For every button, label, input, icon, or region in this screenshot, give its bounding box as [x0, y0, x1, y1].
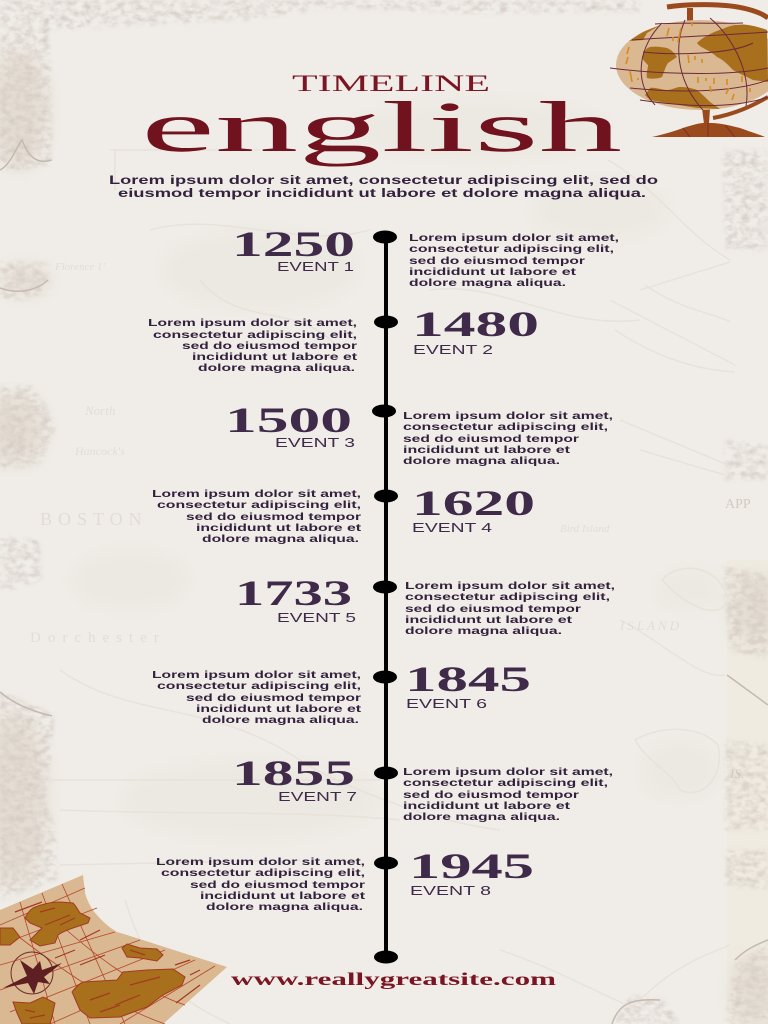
land: left continent	[0, 928, 20, 945]
event 7: dolore magna aliqua.	[403, 811, 560, 823]
event 7: Lorem ipsum dolor sit amet,	[403, 766, 613, 778]
event 1	[232, 224, 619, 289]
event 1: EVENT 1	[277, 259, 354, 274]
event 3: sed do eiusmod tempor	[403, 433, 579, 445]
land: lower continent	[645, 87, 720, 109]
event 4: sed do eiusmod tempor	[186, 511, 361, 523]
event 1: Lorem ipsum dolor sit amet,	[409, 232, 619, 244]
background: antique map: North	[84, 403, 115, 418]
background: antique map: Bird Island	[560, 523, 610, 535]
event 4: dolore magna aliqua.	[202, 533, 359, 545]
land: middle continent	[642, 47, 677, 79]
title: TIMELINE: TIMELINE	[292, 71, 490, 96]
event 3: 1500	[225, 400, 352, 440]
event 8: dolore magna aliqua.	[206, 901, 363, 913]
event 4	[152, 483, 535, 545]
globe stand	[652, 123, 765, 137]
event 8: Lorem ipsum dolor sit amet,	[156, 856, 365, 868]
event 2: sed do eiusmod tempor	[182, 340, 357, 352]
event 1: 1250	[232, 224, 355, 264]
icon: globe	[610, 5, 768, 137]
event 6: sed do eiusmod tempor	[186, 692, 361, 704]
event 2	[148, 304, 539, 374]
title: english: english	[141, 87, 622, 167]
intro text	[109, 173, 658, 200]
event 1: dolore magna aliqua.	[409, 277, 566, 289]
event 7: sed do eiusmod tempor	[403, 789, 579, 801]
event 6: EVENT 6	[406, 696, 487, 711]
background: antique map: Dorchester	[30, 630, 166, 646]
land: small island	[122, 944, 163, 961]
event 7: EVENT 7	[278, 789, 357, 804]
event 2: incididunt ut labore et	[192, 351, 358, 363]
background: antique map: BOSTON	[40, 509, 148, 529]
intro text: Lorem ipsum dolor sit amet, consectetur adipiscing elit, sed do	[109, 173, 658, 187]
event 3: consectetur adipiscing elit,	[403, 421, 608, 433]
background: antique map: ISLAND	[619, 618, 682, 633]
event 5	[235, 573, 615, 637]
event 3	[225, 400, 613, 467]
event 6: incididunt ut labore et	[196, 703, 362, 715]
event 3: EVENT 3	[275, 435, 355, 450]
event 6: 1845	[405, 659, 531, 699]
event 5: consectetur adipiscing elit,	[405, 591, 610, 603]
event 5: Lorem ipsum dolor sit amet,	[405, 580, 615, 592]
event 6	[152, 659, 531, 726]
event 8: sed do eiusmod tempor	[190, 879, 365, 891]
event 5: EVENT 5	[277, 610, 356, 625]
event 4: EVENT 4	[412, 520, 492, 535]
event 5: sed do eiusmod tempor	[405, 603, 581, 615]
event 5: 1733	[235, 573, 352, 613]
event 8: EVENT 8	[410, 883, 491, 898]
land: bottom continent	[13, 997, 55, 1024]
event 8: consectetur adipiscing elit,	[161, 867, 365, 879]
event 2: consectetur adipiscing elit,	[153, 329, 357, 341]
event 2: dolore magna aliqua.	[198, 362, 355, 374]
background: antique map: IS.	[729, 766, 744, 781]
event 6: consectetur adipiscing elit,	[157, 680, 361, 692]
event 5: incididunt ut labore et	[405, 614, 573, 626]
event 2: EVENT 2	[413, 342, 493, 357]
event 6: dolore magna aliqua.	[202, 714, 359, 726]
event 2: Lorem ipsum dolor sit amet,	[148, 317, 357, 329]
event 1: sed do eiusmod tempor	[409, 255, 585, 267]
event 6: Lorem ipsum dolor sit amet,	[152, 669, 361, 681]
land: large continent	[72, 969, 185, 1018]
icon: compass rose	[3, 952, 62, 994]
background: antique map: APP	[725, 497, 751, 512]
icon: treasure map	[0, 875, 227, 1024]
land: upper left	[629, 25, 660, 41]
event 1: consectetur adipiscing elit,	[409, 243, 614, 255]
event 2: 1480	[412, 304, 539, 344]
event 3: incididunt ut labore et	[403, 444, 571, 456]
event 8	[156, 846, 534, 913]
event 5: dolore magna aliqua.	[405, 625, 562, 637]
event 7: incididunt ut labore et	[403, 800, 571, 812]
land: right continent	[697, 24, 768, 82]
event 4: Lorem ipsum dolor sit amet,	[152, 488, 361, 500]
land: top continent	[25, 902, 90, 946]
background: antique map: Florence 1'	[54, 261, 106, 273]
footer url: www.reallygreatsite.com	[231, 969, 556, 989]
event 4: consectetur adipiscing elit,	[157, 499, 361, 511]
event 7: consectetur adipiscing elit,	[403, 777, 608, 789]
event 4: incididunt ut labore et	[196, 522, 362, 534]
intro text: eiusmod tempor incididunt ut labore et dolore magna aliqua.	[118, 186, 646, 200]
background: antique map: Hancock's	[74, 444, 125, 458]
event 3: dolore magna aliqua.	[403, 455, 560, 467]
timeline axis	[372, 230, 398, 964]
event 3: Lorem ipsum dolor sit amet,	[403, 410, 613, 422]
event 1: incididunt ut labore et	[409, 266, 577, 278]
event 8: 1945	[409, 846, 534, 886]
event 7: 1855	[232, 753, 355, 793]
event 7	[232, 753, 613, 823]
event 4: 1620	[412, 483, 535, 523]
event 8: incididunt ut labore et	[200, 890, 366, 902]
